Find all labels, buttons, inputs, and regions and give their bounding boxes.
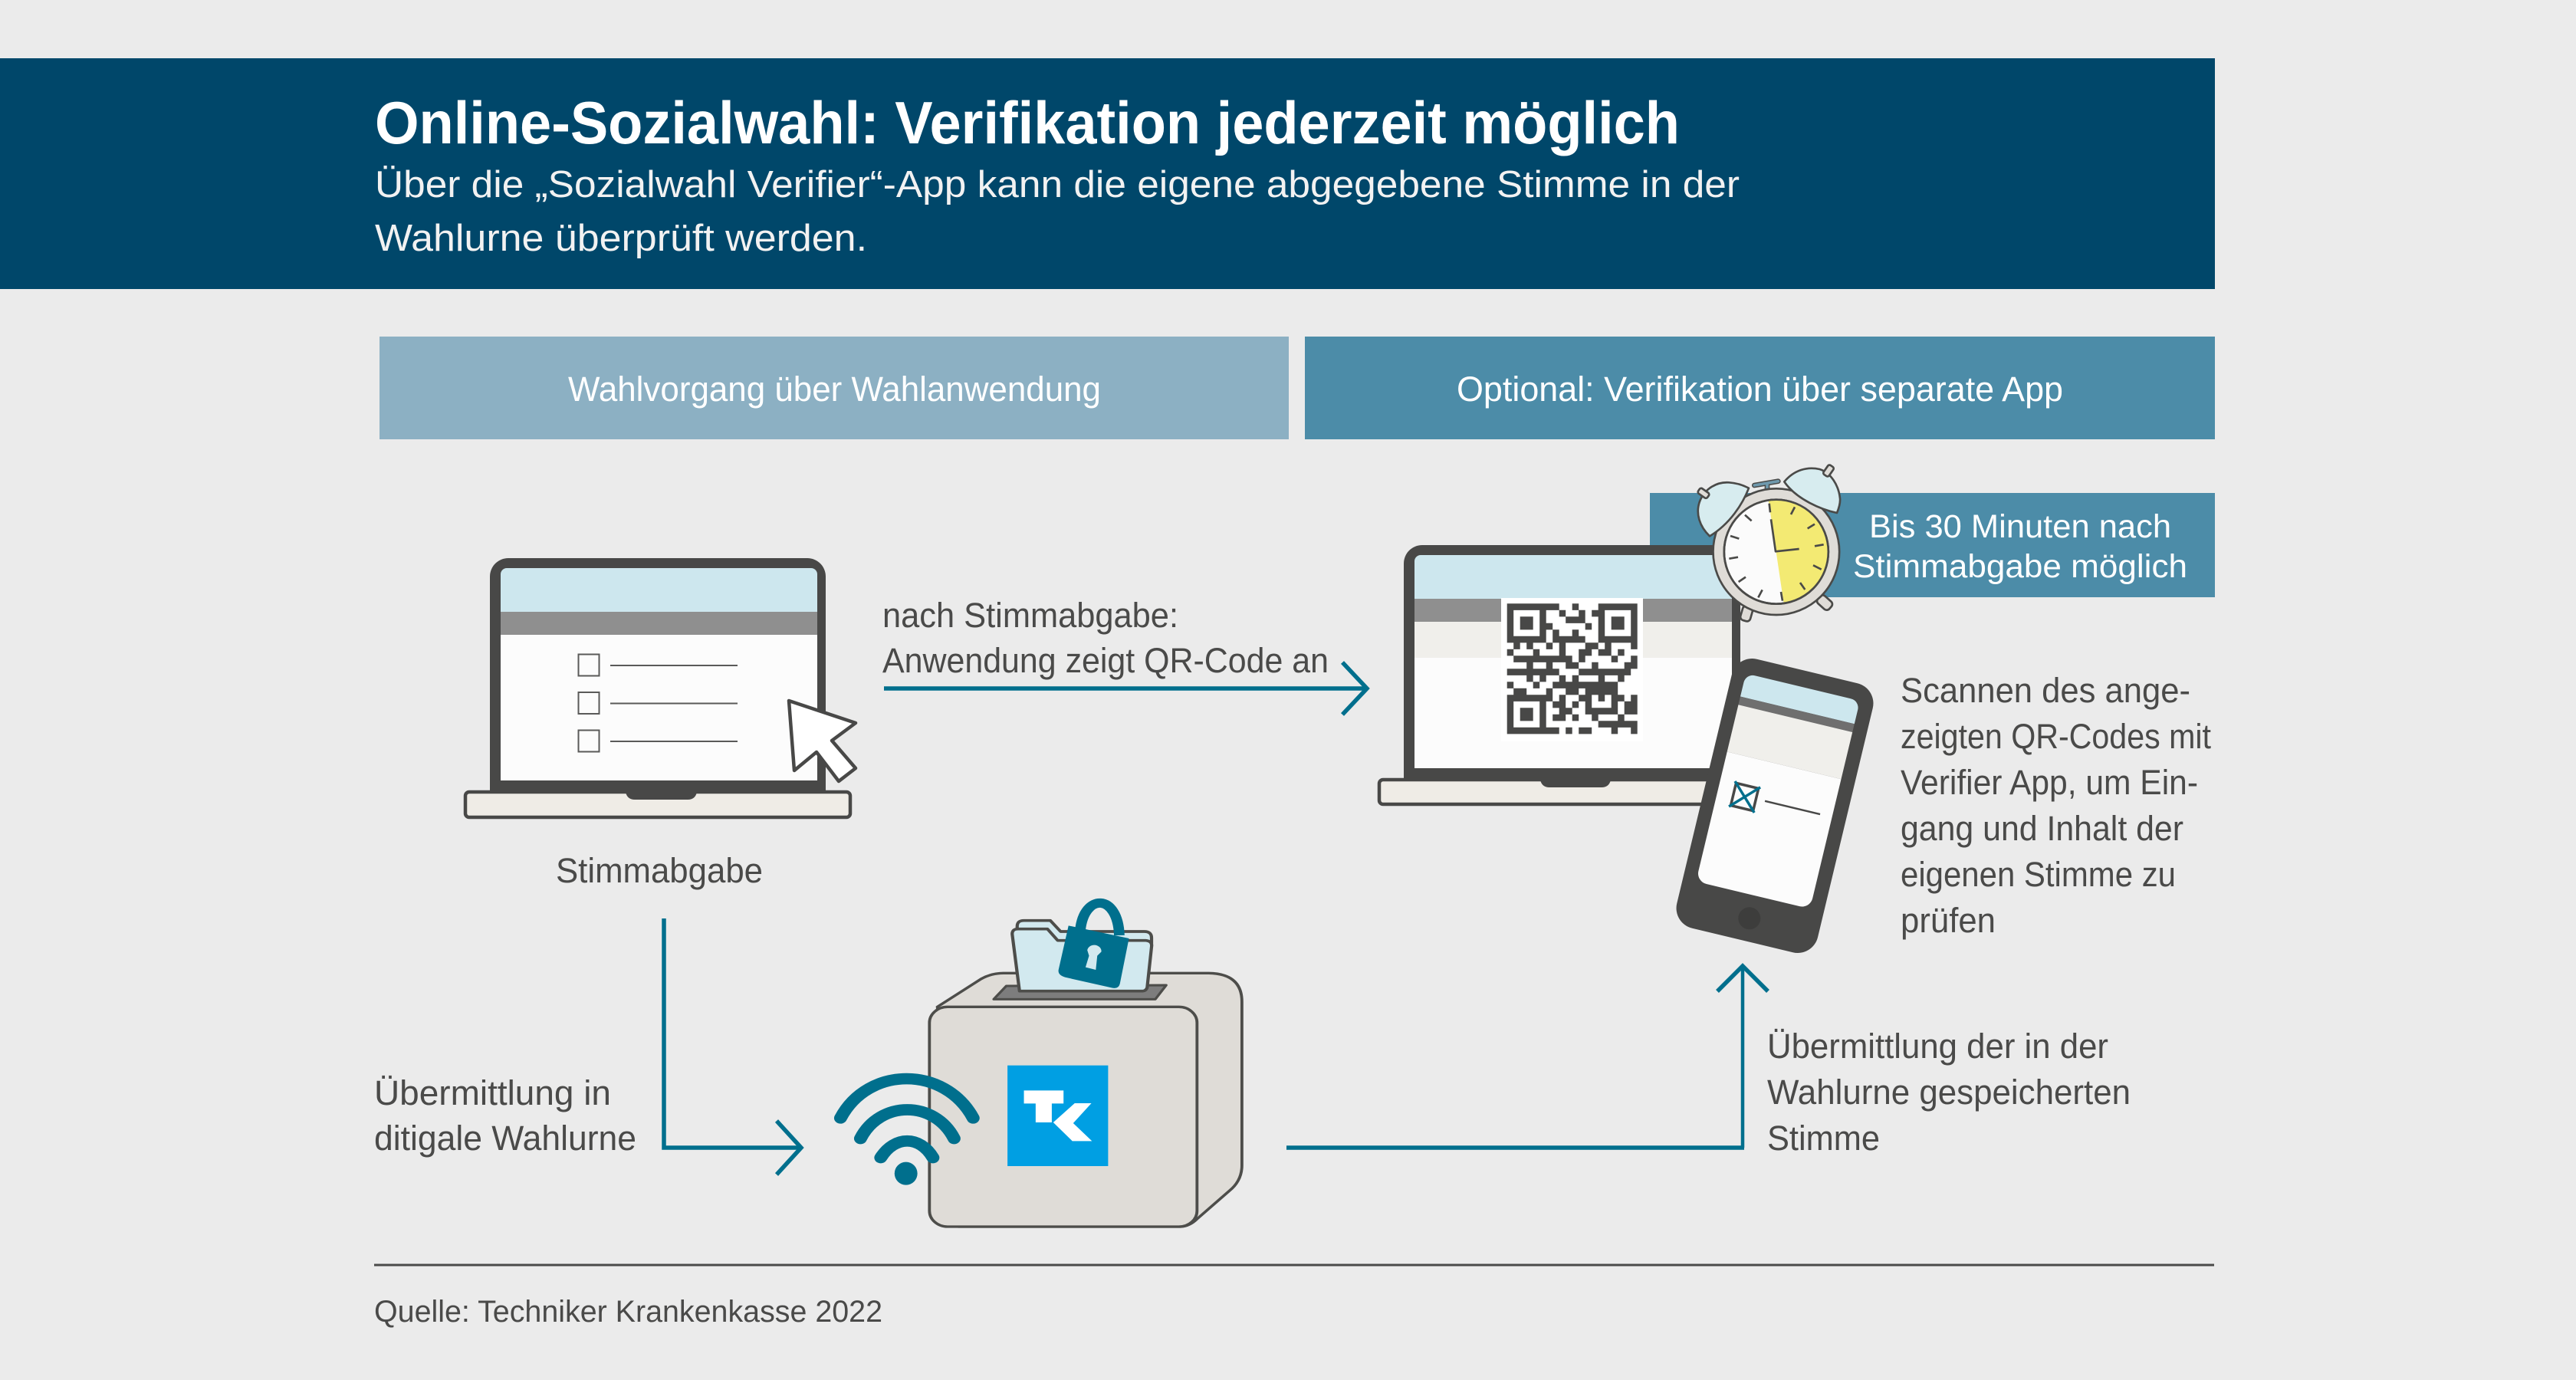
checkbox list xyxy=(578,655,738,751)
box front xyxy=(929,1007,1197,1227)
label: nach Stimmabgabe xyxy=(882,596,1329,680)
right bell xyxy=(1784,468,1840,513)
label: nach Stimmabgabe: nach Stimmabgabe: xyxy=(882,596,1178,635)
QR code xyxy=(1501,598,1643,741)
arrow: ballot box to phone xyxy=(1286,966,1768,1148)
checked box xyxy=(1729,781,1760,813)
text block: scanning explanation: Verifier App, um Ein- xyxy=(1901,763,2198,802)
label: transmission to phone: Übermittlung der in der xyxy=(1767,1027,2108,1066)
text block: scanning explanation: Scannen des ange- xyxy=(1901,671,2190,710)
icon: wifi xyxy=(840,1079,973,1185)
callout text: time limit: Stimmabgabe möglich xyxy=(1853,548,2187,585)
label: transmission to ballot box: Übermittlung in xyxy=(374,1073,611,1112)
icon: mouse cursor xyxy=(789,701,856,781)
clock body xyxy=(1713,488,1839,615)
left bell xyxy=(1698,482,1749,536)
laptop with ballot xyxy=(465,558,856,817)
label: transmission to ballot box xyxy=(374,1073,636,1158)
column header: voting: Wahlvorgang über Wahlanwendung xyxy=(568,370,1101,409)
text block: scanning explanation xyxy=(1901,671,2211,940)
subtitle: Über die „Sozialwahl Verifier“-App kann die eigene abgegebene Stimme in der xyxy=(375,164,1740,205)
column header: voting xyxy=(380,337,1289,439)
ballot box with folder, lock, logo and wifi xyxy=(840,903,1242,1227)
callout: time limit box xyxy=(1650,493,2215,597)
clock hands xyxy=(1771,519,1799,551)
box top and side xyxy=(938,973,1242,1227)
label: transmission to phone: Stimme xyxy=(1767,1119,1880,1158)
label: nach Stimmabgabe: Anwendung zeigt QR-Code an xyxy=(882,641,1329,680)
arrow: laptop to ballot box xyxy=(664,918,801,1175)
text block: scanning explanation: gang und Inhalt der xyxy=(1901,809,2183,848)
clock top handle xyxy=(1754,481,1778,490)
label: transmission to ballot box: ditigale Wahlurne xyxy=(374,1119,636,1158)
text block: scanning explanation: zeigten QR-Codes mit xyxy=(1901,717,2211,756)
icon: folder xyxy=(1012,921,1152,991)
source note: Quelle: Techniker Krankenkasse 2022 xyxy=(374,1295,882,1329)
header banner xyxy=(0,58,2215,289)
callout text: time limit: Bis 30 Minuten nach xyxy=(1869,508,2171,545)
label: transmission to phone: Wahlurne gespeicherten xyxy=(1767,1073,2131,1112)
icon: padlock xyxy=(1059,903,1129,988)
subtitle xyxy=(375,164,1740,259)
slot xyxy=(994,985,1166,999)
tick marks xyxy=(1729,504,1824,601)
arrow: laptop to QR code xyxy=(884,662,1367,715)
logo: TK xyxy=(1007,1066,1108,1166)
text block: scanning explanation: prüfen xyxy=(1901,901,1996,940)
laptop with QR code xyxy=(1379,545,1763,804)
elapsed time sector xyxy=(1769,500,1829,603)
text block: scanning explanation: eigenen Stimme zu xyxy=(1901,855,2176,894)
clock feet xyxy=(1740,593,1834,622)
column header: verification xyxy=(1305,337,2215,439)
callout text: time limit xyxy=(1853,508,2187,585)
label: transmission to phone xyxy=(1767,1027,2131,1158)
title: Online-Sozialwahl: Verifikation jederzeit möglich xyxy=(375,89,1680,156)
home button xyxy=(1736,905,1763,932)
label: Stimmabgabe: Stimmabgabe xyxy=(556,851,763,890)
column header: verification: Optional: Verifikation über separate App xyxy=(1457,370,2063,409)
icon: alarm clock xyxy=(1697,465,1840,622)
subtitle: Wahlurne überprüft werden. xyxy=(375,218,867,259)
phone with verifier app xyxy=(1672,654,1878,958)
keyhole xyxy=(1086,945,1102,970)
